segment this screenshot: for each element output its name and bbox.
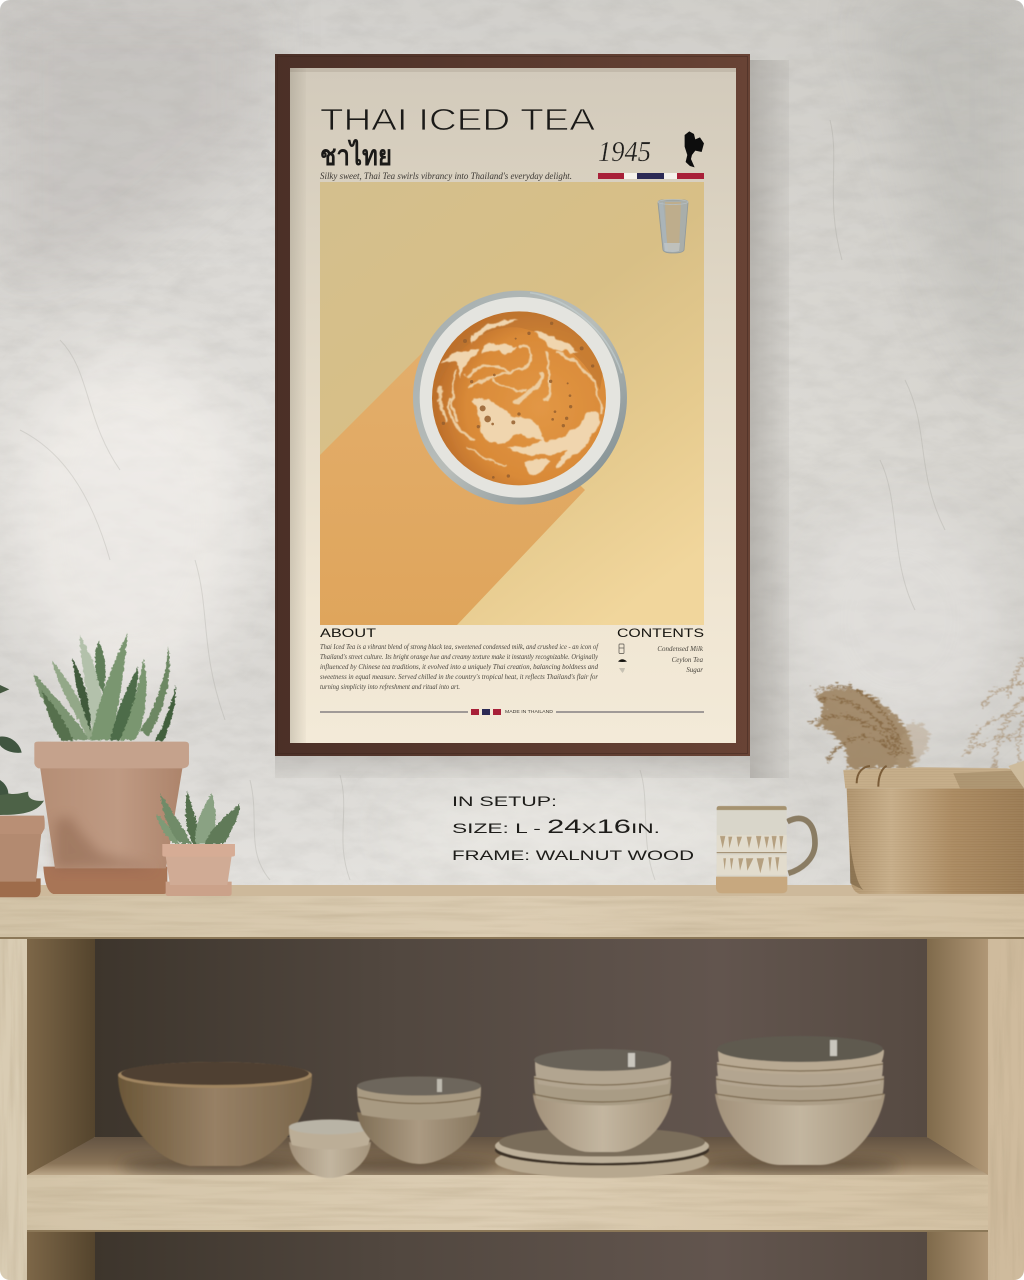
right post front — [988, 938, 1024, 1280]
icon: empty glass — [658, 200, 688, 253]
woven basket — [843, 761, 1024, 894]
speckled mug — [716, 806, 815, 893]
heading: Thai Iced Tea: THAI ICED TEA — [320, 103, 596, 137]
small right succulent — [156, 790, 240, 844]
about paragraph: Thailand's street culture. Its bright orange hue and creamy texture make it instantly recognizable. Originally — [320, 652, 599, 661]
long cast shadow — [320, 343, 585, 625]
flag stripe — [598, 173, 704, 179]
milk swirl — [433, 312, 603, 479]
about paragraph: sweetness in equal measure. Served chilled in the country's tropical heat, it reflects Thailand's flair for — [320, 672, 598, 681]
framed poster — [275, 54, 750, 756]
bowl shadows on lower board — [120, 1157, 900, 1182]
small right pot — [162, 844, 235, 896]
lower board top — [27, 1137, 988, 1175]
top board front — [0, 896, 1024, 938]
shelf unit — [0, 885, 1024, 1280]
right post inner side — [927, 938, 988, 1280]
tagline: Silky sweet, Thai Tea swirls vibrancy into Thailand's everyday delight. — [320, 172, 572, 182]
contents list — [618, 644, 704, 674]
setup details text: IN SETUP: — [452, 793, 557, 809]
stacked plates — [495, 1128, 709, 1178]
plants: left group — [0, 633, 240, 897]
large terracotta pot — [34, 742, 189, 894]
ingredient names — [657, 645, 704, 674]
heading: Thai script name: ชาไทย — [320, 139, 392, 171]
cup of Thai tea from above — [413, 291, 627, 505]
icon: condensed milk can — [619, 644, 624, 654]
poster paper — [290, 68, 736, 743]
white cup wall — [420, 297, 620, 498]
icon: sugar — [619, 668, 625, 673]
bowl stack on plates — [533, 1049, 672, 1152]
setup details text — [452, 793, 694, 863]
about paragraph: Thai Iced Tea is a vibrant blend of strong black tea, sweetened condensed milk, and crushed ice - an icon of — [320, 642, 599, 651]
mug and basket with dried grass — [716, 660, 1024, 894]
heading: Contents: CONTENTS — [617, 626, 704, 640]
ingredient names: Ceylon Tea — [672, 656, 703, 664]
ingredient names: Condensed Milk — [657, 645, 704, 653]
left edge succulent — [0, 685, 44, 815]
walnut frame — [275, 54, 750, 756]
ingredient names: Sugar — [686, 666, 703, 674]
about paragraph — [320, 642, 599, 691]
left post inner side — [27, 938, 95, 1280]
icon: map of Thailand — [685, 131, 704, 167]
large succulent — [33, 633, 176, 741]
left edge pot — [0, 816, 45, 897]
heading: About: ABOUT — [320, 626, 377, 640]
left post front — [0, 938, 27, 1280]
frame cast shadow on wall — [275, 60, 789, 778]
stacked ceramic bowls and plates — [118, 1036, 885, 1178]
about paragraph: turning simplicity into refreshment and ritual into art. — [320, 682, 460, 691]
glass rim — [413, 291, 627, 505]
medium bowl stack — [357, 1076, 481, 1164]
dried pampas grass — [810, 660, 1024, 768]
lower board front — [27, 1175, 988, 1232]
tall bowl stack — [715, 1036, 885, 1165]
top board surface — [0, 885, 1024, 896]
icon: tea heap — [618, 659, 627, 662]
setup details text: SIZE: L - 24 X 16 IN. — [452, 817, 660, 838]
back wall of shelf — [95, 938, 927, 1280]
made in Thailand footer — [320, 709, 704, 715]
made in Thailand footer: MADE IN THAILAND — [505, 709, 553, 714]
large dark bowl — [118, 1062, 312, 1166]
wall background — [0, 0, 1024, 900]
tea surface — [432, 311, 606, 485]
setup details text: FRAME: WALNUT WOOD — [452, 847, 694, 863]
year 1945: 1945 — [598, 137, 651, 168]
about paragraph: influenced by Chinese tea traditions, it evolved into a uniquely Thai creation, balancing boldness and — [320, 662, 598, 671]
panel: illustration — [320, 182, 704, 625]
small cup stack — [289, 1120, 371, 1178]
